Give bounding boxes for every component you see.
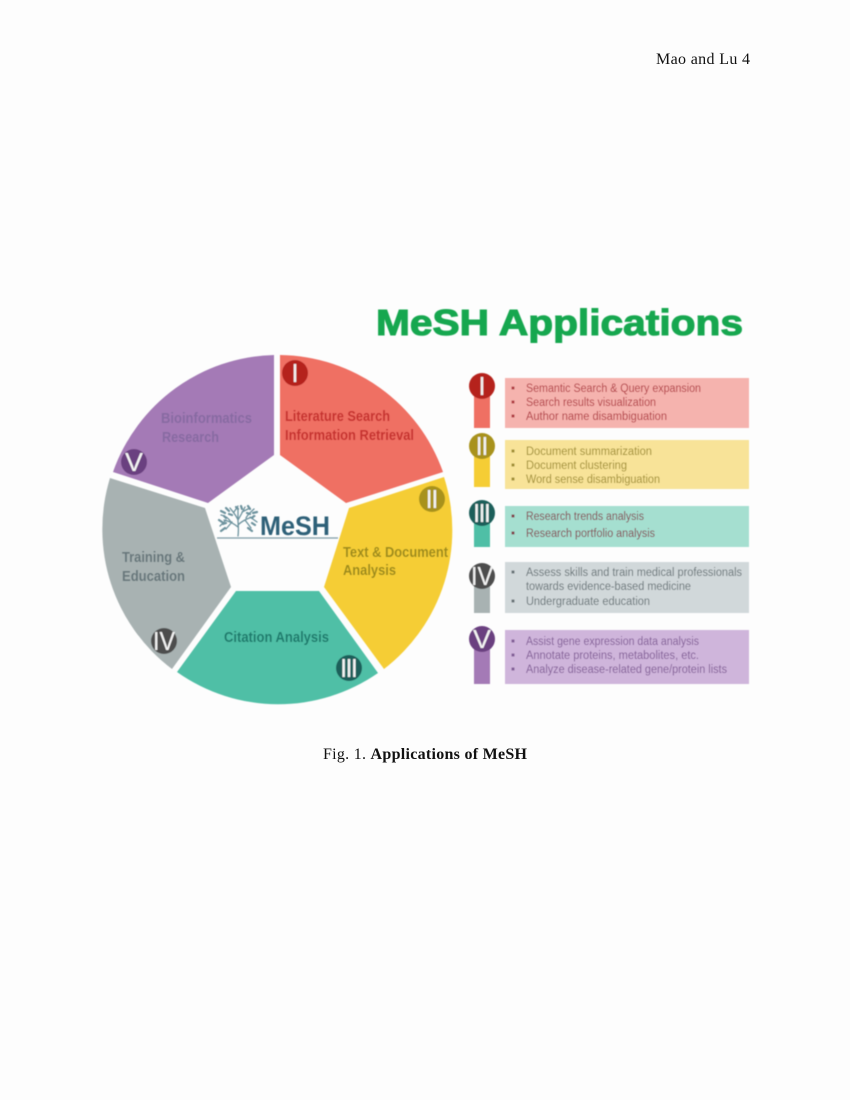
row V: Annotate proteins, metabolites, etc. <box>526 650 699 662</box>
row IV: Assess skills and train medical professionals <box>526 567 742 579</box>
segment I: literature search: I <box>291 358 299 388</box>
segment V: bioinformatics research: Research <box>162 430 219 446</box>
MeSH logo <box>217 506 338 541</box>
segment V: bioinformatics research <box>113 355 274 503</box>
row V: V <box>473 624 492 654</box>
segment I: literature search: Literature Search <box>285 409 390 425</box>
segment V: bioinformatics research: Bioinformatics <box>161 411 252 427</box>
segment II: text and document analysis: Analysis <box>343 563 396 579</box>
row II: Document clustering <box>526 460 627 472</box>
row I: Search results visualization <box>526 397 656 409</box>
figure caption: Fig. 1. Applications of MeSH <box>323 746 528 763</box>
row II: Document summarization <box>526 446 652 458</box>
row V <box>469 624 749 684</box>
row IV: IV <box>471 561 494 591</box>
icon: tree <box>219 506 257 536</box>
row II: II <box>476 431 488 461</box>
segment I: literature search <box>280 355 443 503</box>
segment II: text and document analysis <box>324 477 452 669</box>
row II <box>469 431 749 489</box>
row III: Research portfolio analysis <box>526 528 655 540</box>
row V: Analyze disease-related gene/protein lists <box>526 664 727 676</box>
segment II: text and document analysis: Text & Document <box>343 545 448 561</box>
MeSH logo: MeSH <box>260 511 330 541</box>
title: MeSH Applications <box>376 302 743 343</box>
segment IV: training and education: IV <box>153 626 176 656</box>
row IV: Undergraduate education <box>526 596 650 608</box>
row IV <box>469 561 749 613</box>
segment V: bioinformatics research: V <box>125 447 144 477</box>
row V: Assist gene expression data analysis <box>526 636 699 648</box>
segment III: citation analysis: Citation Analysis <box>224 630 329 646</box>
panel: pie wheel <box>102 355 452 704</box>
figure: MeSH applications <box>102 302 749 704</box>
row I <box>469 371 749 428</box>
segment IV: training and education <box>102 478 231 669</box>
row I: Author name disambiguation <box>526 411 667 423</box>
row IV: towards evidence-based medicine <box>526 581 691 593</box>
row II: Word sense disambiguation <box>526 474 660 486</box>
panel: application lists <box>469 371 749 684</box>
segment II: text and document analysis: II <box>426 484 438 514</box>
segment I: literature search: Information Retrieval <box>285 428 414 444</box>
row III: Research trends analysis <box>526 511 644 523</box>
row III <box>469 498 749 547</box>
row I: I <box>478 371 486 401</box>
segment IV: training and education: Education <box>122 569 185 585</box>
segment III: citation analysis: III <box>340 653 358 683</box>
page header: Mao and Lu 4 <box>656 51 750 68</box>
segment IV: training and education: Training & <box>122 550 185 566</box>
row III: III <box>473 498 491 528</box>
row I: Semantic Search & Query expansion <box>526 383 701 395</box>
segment III: citation analysis <box>177 591 378 704</box>
